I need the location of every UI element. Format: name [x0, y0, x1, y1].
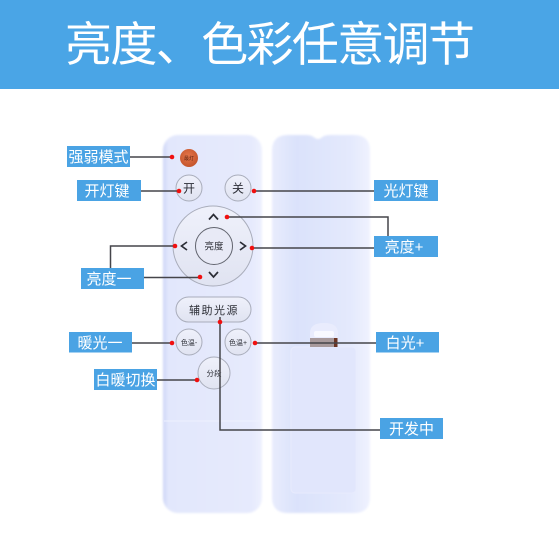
button: auxiliary light	[176, 297, 251, 322]
remote back	[272, 135, 370, 513]
label: 开灯键: 开灯键	[84, 183, 130, 200]
button: colour temp minus	[176, 329, 202, 355]
marker dots	[170, 155, 257, 382]
label: 强弱模式: 强弱模式	[68, 149, 129, 166]
label: 亮度一: 亮度一	[86, 271, 132, 288]
directional pad: 亮度	[204, 240, 224, 252]
button: auxiliary light: 辅助光源	[189, 303, 239, 317]
label: 亮度一	[81, 268, 144, 289]
battery latch	[310, 323, 338, 347]
label: 亮度+	[374, 236, 438, 257]
chevron left	[182, 242, 187, 250]
label: 亮度+: 亮度+	[385, 239, 424, 256]
chevron right	[240, 242, 246, 250]
label: 开发中: 开发中	[389, 421, 434, 438]
button: colour temp plus: 色温+	[229, 338, 247, 347]
chevron down	[209, 272, 218, 277]
directional pad	[173, 206, 253, 286]
label: 暖光一	[69, 332, 132, 352]
leader lines	[110, 157, 388, 430]
button: on: 开	[183, 182, 195, 196]
label: 光灯键: 光灯键	[383, 183, 429, 200]
button: strength mode: 最灯	[184, 155, 194, 162]
label: 光灯键	[374, 180, 438, 201]
button: segment: 分段	[206, 368, 222, 378]
button: colour temp minus: 色温-	[181, 338, 198, 347]
button: off	[225, 175, 251, 201]
button: off: 关	[232, 182, 244, 196]
label: 白光+	[376, 332, 439, 352]
remote front	[163, 135, 262, 513]
chevron up	[209, 214, 218, 220]
button: colour temp plus	[225, 329, 251, 355]
button: segment	[198, 357, 230, 389]
label: 白光+: 白光+	[386, 335, 425, 352]
label: 白暖切换: 白暖切换	[95, 372, 156, 389]
battery cover	[291, 347, 356, 493]
button: strength mode	[180, 149, 198, 167]
header banner	[0, 0, 559, 89]
label: 暖光一: 暖光一	[77, 335, 123, 352]
label: 开灯键	[77, 180, 141, 201]
title: 亮度、色彩任意调节	[65, 18, 475, 71]
label: 开发中	[380, 418, 443, 439]
button: on	[176, 175, 202, 201]
